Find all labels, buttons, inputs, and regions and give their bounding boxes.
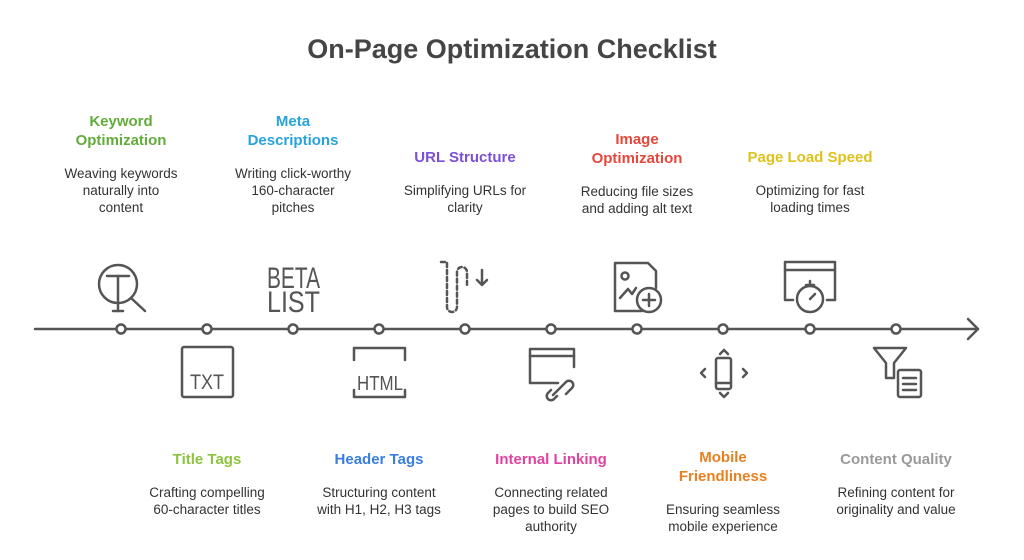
icon: html bbox=[354, 348, 405, 397]
icon: mobile bbox=[701, 350, 747, 397]
item: keyword optimization: Keyword bbox=[89, 113, 153, 130]
item: meta descriptions: pitches bbox=[272, 200, 314, 215]
item: internal linking: pages to build SEO bbox=[493, 502, 609, 517]
icon: keyword magnifier bbox=[99, 265, 145, 311]
item: image optimization bbox=[581, 131, 693, 216]
item: keyword optimization: content bbox=[99, 200, 143, 215]
item: page load speed: Page Load Speed bbox=[747, 149, 873, 166]
item: meta descriptions: Writing click-worthy bbox=[235, 166, 351, 181]
icon: txt bbox=[182, 347, 233, 397]
item: title tags: 60-character titles bbox=[153, 502, 261, 517]
item: content quality bbox=[836, 451, 956, 517]
item: url structure: Simplifying URLs for bbox=[404, 183, 526, 198]
icon: funnel bbox=[874, 348, 921, 397]
item: mobile friendliness: mobile experience bbox=[668, 519, 778, 534]
item: internal linking: Internal Linking bbox=[495, 451, 607, 468]
item: content quality: Content Quality bbox=[840, 451, 952, 468]
item: meta descriptions bbox=[235, 113, 351, 215]
icon: beta list: BETA bbox=[267, 262, 320, 295]
icon: image bbox=[615, 263, 661, 312]
icon: html: HTML bbox=[357, 373, 403, 395]
icon: beta list: LIST bbox=[267, 286, 320, 319]
item: image optimization: Image bbox=[615, 131, 659, 148]
item: mobile friendliness: Ensuring seamless bbox=[666, 502, 780, 517]
item: header tags bbox=[317, 451, 441, 517]
item: content quality: originality and value bbox=[836, 502, 956, 517]
item: title tags: Crafting compelling bbox=[149, 485, 265, 500]
item: url structure: URL Structure bbox=[414, 149, 516, 166]
item: page load speed: loading times bbox=[770, 200, 850, 215]
icon: link bbox=[530, 349, 574, 400]
item: mobile friendliness: Mobile bbox=[699, 449, 747, 466]
item: internal linking: Connecting related bbox=[494, 485, 608, 500]
item: url structure bbox=[404, 149, 526, 215]
item: page load speed: Optimizing for fast bbox=[756, 183, 864, 198]
item: url structure: clarity bbox=[447, 200, 483, 215]
item: image optimization: Reducing file sizes bbox=[581, 184, 693, 199]
item: meta descriptions: Meta bbox=[276, 113, 310, 130]
item: mobile friendliness bbox=[666, 449, 780, 534]
item: image optimization: Optimization bbox=[592, 150, 682, 167]
icon: beta list bbox=[267, 262, 320, 319]
item: title tags: Title Tags bbox=[173, 451, 241, 468]
item: content quality: Refining content for bbox=[837, 485, 955, 500]
item: page load speed bbox=[747, 149, 873, 215]
icon: speed bbox=[785, 262, 835, 312]
item: keyword optimization: Weaving keywords bbox=[64, 166, 178, 181]
item: keyword optimization: Optimization bbox=[76, 132, 166, 149]
item: title tags bbox=[149, 451, 265, 517]
title: On-Page Optimization Checklist bbox=[307, 34, 717, 64]
icon: txt: TXT bbox=[190, 371, 224, 394]
item: internal linking bbox=[493, 451, 609, 534]
item: meta descriptions: 160-character bbox=[251, 183, 335, 198]
item: keyword optimization bbox=[64, 113, 178, 215]
item: mobile friendliness: Friendliness bbox=[679, 468, 767, 485]
item: image optimization: and adding alt text bbox=[582, 201, 692, 216]
item: internal linking: authority bbox=[525, 519, 577, 534]
item: keyword optimization: naturally into bbox=[83, 183, 159, 198]
item: header tags: with H1, H2, H3 tags bbox=[317, 502, 441, 517]
item: header tags: Structuring content bbox=[322, 485, 436, 500]
item: header tags: Header Tags bbox=[335, 451, 423, 468]
icon: url path bbox=[441, 262, 467, 312]
item: meta descriptions: Descriptions bbox=[248, 132, 338, 149]
